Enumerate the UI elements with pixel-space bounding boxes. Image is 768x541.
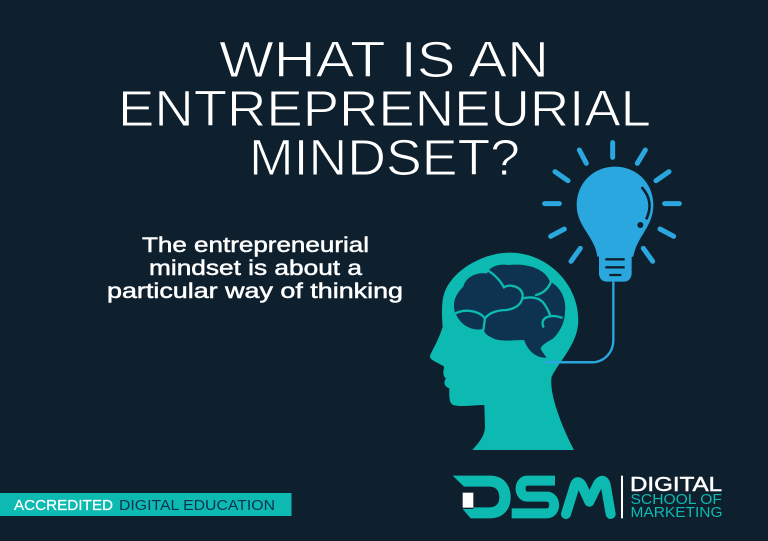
logo: DSM digital school of marketing — [453, 474, 722, 521]
icon: brain — [454, 265, 565, 358]
subtitle text block: The entrepreneurial — [142, 234, 369, 257]
badge: accredited digital education: ACCREDITED — [14, 498, 113, 514]
logo wordmark: SCHOOL OF — [630, 492, 722, 508]
title: ENTREPRENEURIAL — [118, 80, 651, 137]
icon: wire entry — [545, 361, 592, 363]
badge: accredited digital education — [0, 493, 292, 516]
logo mark: DSM — [453, 476, 623, 518]
logo wordmark: MARKETING — [630, 505, 722, 521]
icon: head silhouette — [430, 253, 578, 450]
subtitle text block: particular way of thinking — [107, 280, 403, 303]
title — [118, 31, 651, 186]
subtitle text block — [107, 234, 403, 303]
subtitle text block: mindset is about a — [149, 257, 362, 280]
logo wordmark — [630, 474, 722, 521]
badge: accredited digital education: DIGITAL EDUCATION — [119, 498, 275, 514]
title: MINDSET? — [249, 129, 520, 186]
icon: light rays — [545, 143, 679, 261]
logo wordmark: DIGITAL — [630, 474, 722, 496]
title: WHAT IS AN — [219, 31, 549, 88]
icon: head with brain and light bulb — [430, 143, 679, 450]
icon: wire — [545, 282, 613, 362]
icon: light bulb — [577, 167, 653, 282]
